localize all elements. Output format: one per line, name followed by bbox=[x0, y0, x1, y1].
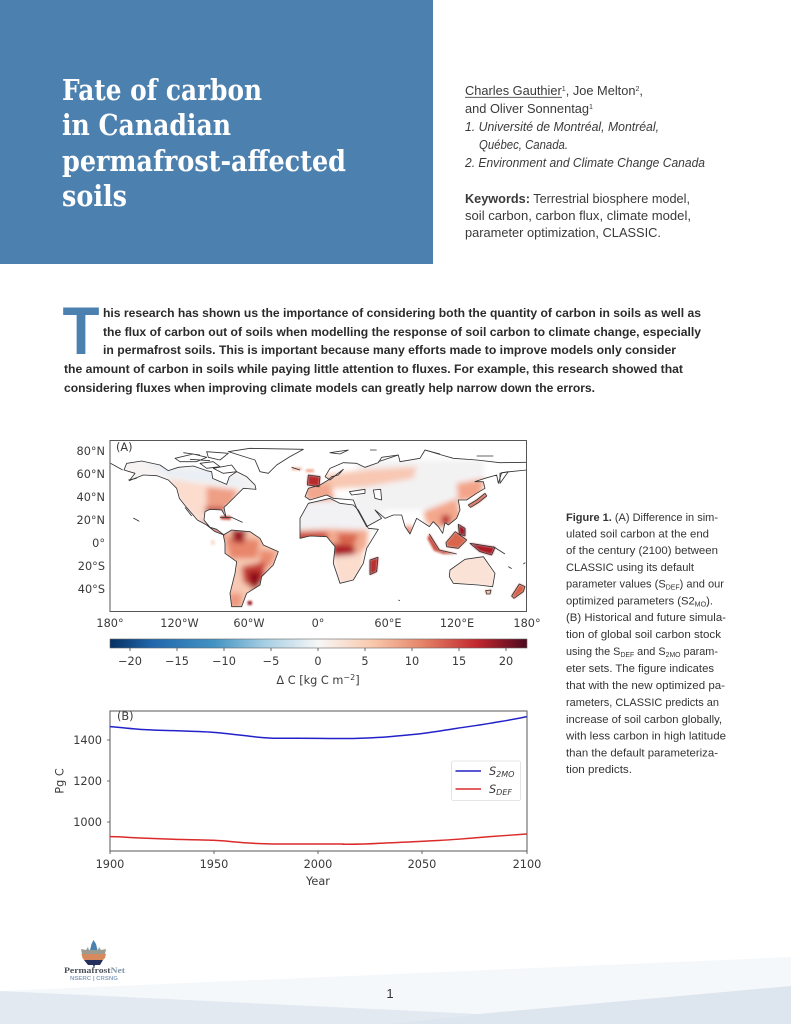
latitude labels: 40°S bbox=[78, 583, 105, 596]
colour bar legend: 10 bbox=[405, 655, 419, 668]
intro paragraph bbox=[64, 306, 701, 395]
latitude labels: 20°N bbox=[77, 514, 105, 527]
latitude labels: 0° bbox=[92, 537, 105, 550]
figure caption: tion predicts. bbox=[566, 764, 632, 776]
longitude labels: 180° bbox=[96, 617, 124, 630]
intro paragraph: the flux of carbon out of soils when modelling the response of soil carbon to climate change, especially bbox=[103, 325, 701, 339]
figure caption: than the default parameteriza- bbox=[566, 748, 718, 760]
line: S2MO bbox=[110, 717, 527, 739]
figure caption: using the S bbox=[566, 646, 622, 658]
authors and affiliations bbox=[464, 84, 705, 170]
keywords bbox=[465, 192, 691, 240]
colour bar legend: −20 bbox=[118, 655, 142, 668]
y axis labels: 1000 bbox=[73, 816, 102, 829]
colour bar legend: 5 bbox=[361, 655, 369, 668]
line: SDEF bbox=[110, 834, 527, 844]
figure caption: with less carbon in high latitude bbox=[565, 730, 726, 742]
latitude labels bbox=[77, 445, 105, 596]
logo: PermafrostNet: Permafrost Net bbox=[64, 965, 125, 975]
title: in Canadian bbox=[62, 108, 231, 142]
keywords: parameter optimization, CLASSIC. bbox=[465, 226, 661, 240]
logo: PermafrostNet: NSERC | CRSNG bbox=[70, 976, 118, 982]
figure caption: 2MO bbox=[666, 652, 681, 659]
colour bar legend: −5 bbox=[263, 655, 279, 668]
chart legend: S bbox=[489, 783, 496, 796]
logo: PermafrostNet bbox=[64, 940, 125, 982]
longitude labels: 180° bbox=[513, 617, 541, 630]
x axis labels: 1900 bbox=[96, 858, 124, 871]
title: Fate of carbon bbox=[62, 73, 262, 107]
figure caption: eter sets. The figure indicates bbox=[566, 663, 714, 675]
footer bands bbox=[0, 957, 791, 1024]
panel label A: (A) bbox=[116, 441, 133, 454]
authors and affiliations: 1 bbox=[589, 104, 593, 111]
figure B: line chart of global soil carbon stock bbox=[54, 710, 541, 888]
x axis labels bbox=[96, 858, 541, 888]
chart legend: DEF bbox=[496, 788, 512, 797]
keywords: soil carbon, carbon flux, climate model, bbox=[465, 209, 691, 223]
authors and affiliations: , Joe Melton bbox=[566, 84, 635, 98]
longitude labels bbox=[96, 617, 541, 630]
figure caption: CLASSIC using its default bbox=[566, 562, 694, 574]
figure caption: rameters, CLASSIC predicts an bbox=[566, 697, 719, 709]
figure caption: that with the new optimized pa- bbox=[566, 680, 725, 692]
y axis labels bbox=[73, 734, 102, 829]
colour bar legend: 20 bbox=[499, 655, 513, 668]
chart legend: 2MO bbox=[496, 770, 514, 779]
title: soils bbox=[62, 179, 127, 213]
y axis title: Pg C bbox=[54, 768, 66, 794]
latitude labels: 40°N bbox=[77, 491, 105, 504]
colour bar legend: −2 bbox=[343, 673, 355, 682]
x axis labels: 1950 bbox=[200, 858, 228, 871]
x axis labels: 2100 bbox=[513, 858, 541, 871]
header panel bbox=[0, 0, 433, 264]
authors and affiliations: 2. Environment and Climate Change Canada bbox=[464, 156, 705, 170]
icon: maple leaf bbox=[81, 940, 106, 968]
latitude labels: 80°N bbox=[77, 445, 105, 458]
authors and affiliations: 1 bbox=[562, 86, 566, 93]
x axis labels: 2000 bbox=[304, 858, 332, 871]
figure caption: of the century (2100) between bbox=[566, 545, 718, 557]
chart legend: S bbox=[489, 765, 496, 778]
longitude labels: 120°E bbox=[440, 617, 474, 630]
figure caption: MO bbox=[695, 602, 707, 608]
page number: 1 bbox=[386, 986, 394, 1001]
heat layer clipped to land bbox=[120, 457, 497, 608]
figure caption: (B) Historical and future simula- bbox=[566, 612, 726, 624]
figure caption: DEF bbox=[666, 584, 680, 592]
authors and affiliations: and Oliver Sonnentag bbox=[465, 102, 587, 116]
authors and affiliations: , bbox=[639, 84, 643, 98]
figure caption: increase of soil carbon globally, bbox=[566, 714, 722, 726]
chart legend bbox=[452, 761, 520, 800]
panel label B: (B) bbox=[117, 710, 134, 723]
colour bar legend: 15 bbox=[452, 655, 466, 668]
authors and affiliations: Québec, Canada. bbox=[479, 138, 568, 152]
longitude labels: 60°W bbox=[233, 617, 265, 630]
figure caption: parameter values (S bbox=[566, 578, 666, 590]
colour bar legend: 0 bbox=[314, 655, 322, 668]
figure caption: tion of global soil carbon stock bbox=[566, 629, 721, 641]
x axis labels: 2050 bbox=[408, 858, 436, 871]
figure caption: ulated soil carbon at the end bbox=[566, 528, 709, 540]
figure caption: param- bbox=[681, 646, 718, 658]
keywords: Keywords: Terrestrial biosphere model, bbox=[465, 192, 690, 206]
longitude labels: 120°W bbox=[160, 617, 199, 630]
colour bar legend bbox=[110, 639, 527, 687]
intro paragraph: considering fluxes when improving climate models can greatly help narrow down the errors. bbox=[64, 381, 595, 395]
latitude labels: 60°N bbox=[77, 468, 105, 481]
figure caption: DEF bbox=[620, 652, 634, 659]
figure A: world map of soil carbon difference bbox=[77, 440, 541, 630]
intro paragraph: in permafrost soils. This is important because many efforts made to improve models only consider bbox=[103, 343, 676, 357]
y axis labels: 1200 bbox=[73, 775, 102, 788]
map frame bbox=[110, 440, 526, 612]
heat on islands bbox=[211, 467, 525, 605]
y axis labels: 1400 bbox=[73, 734, 102, 747]
intro paragraph: his research has shown us the importance of considering both the quantity of carbon in soils as well as bbox=[103, 306, 701, 320]
title: permafrost-affected bbox=[62, 144, 346, 178]
colour bar legend: ] bbox=[355, 674, 360, 687]
longitude labels: 60°E bbox=[374, 617, 402, 630]
figure caption: ) and our bbox=[680, 578, 724, 590]
authors and affiliations: 1. Université de Montréal, Montréal, bbox=[465, 120, 659, 134]
authors and affiliations: Charles Gauthier bbox=[465, 84, 560, 98]
longitude labels: 0° bbox=[312, 617, 324, 630]
figure caption: Figure 1. (A) Difference in sim- bbox=[566, 512, 718, 524]
intro paragraph: the amount of carbon in soils while paying little attention to fluxes. For example, this research showed that bbox=[64, 362, 683, 376]
figure caption: and S bbox=[634, 646, 666, 658]
colour bar legend: Δ C [kg C m bbox=[276, 674, 343, 687]
authors and affiliations: 2 bbox=[635, 86, 640, 93]
drop cap T: T bbox=[62, 293, 100, 369]
figure caption: optimized parameters (S2 bbox=[566, 596, 693, 608]
title bbox=[62, 73, 346, 213]
colour bar legend: −10 bbox=[212, 655, 236, 668]
figure caption bbox=[565, 512, 726, 776]
coastlines bbox=[111, 448, 303, 607]
latitude labels: 20°S bbox=[78, 560, 105, 573]
x axis labels: Year bbox=[305, 875, 330, 888]
colour bar legend: −15 bbox=[165, 655, 189, 668]
figure caption: ). bbox=[706, 596, 713, 608]
